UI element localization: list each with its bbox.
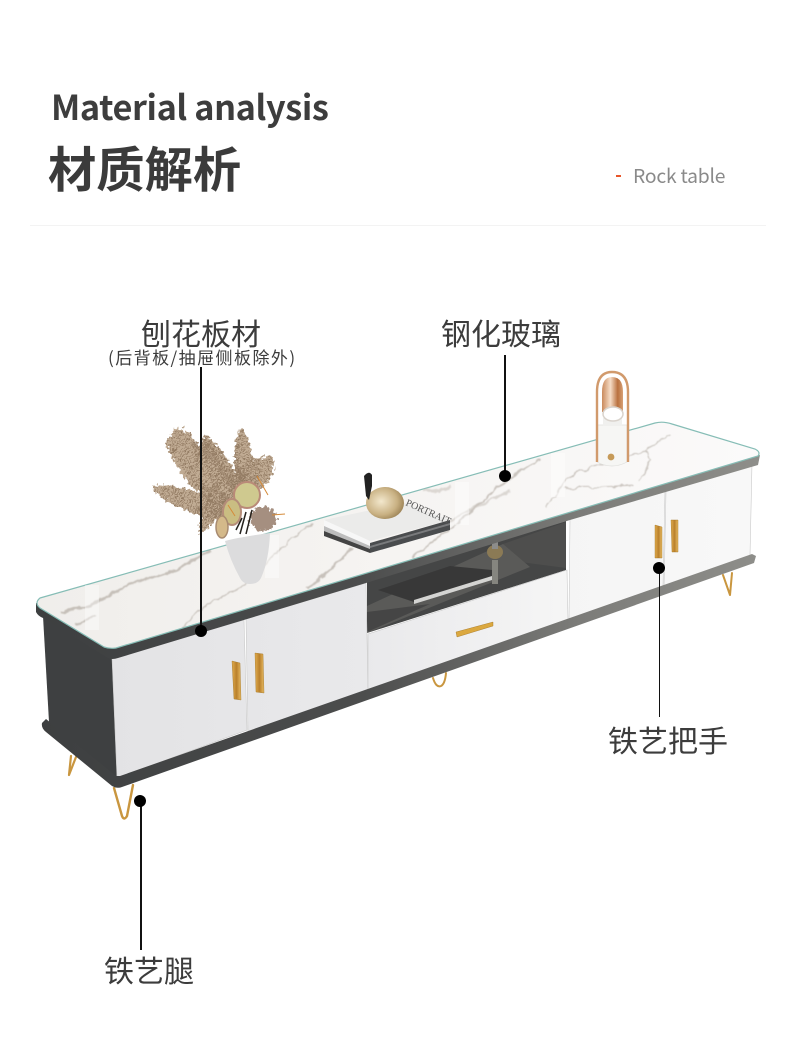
door handles (232, 520, 678, 700)
heading: 材质解析: 材质解析 (48, 131, 241, 201)
cabinet door fronts (112, 463, 752, 778)
label: 铁艺把手: 铁艺把手 (608, 717, 728, 761)
marble veins (60, 435, 670, 630)
marble glass table top (37, 422, 759, 648)
white vase (225, 533, 270, 584)
niche interior (367, 521, 566, 633)
callout line and dot: 钢化玻璃 (499, 355, 511, 482)
label: 刨花板材: 刨花板材 (141, 310, 261, 354)
product illustration: TV cabinet (36, 370, 760, 820)
stacked books: PORTRAIT (404, 498, 452, 527)
stacked books (324, 498, 452, 553)
table top band (36, 455, 760, 659)
base band (42, 554, 756, 788)
dry pampas bouquet (152, 427, 274, 537)
label: 钢化玻璃: 钢化玻璃 (441, 310, 561, 354)
callout line and dot: 刨花板材 (195, 367, 207, 637)
label: 铁艺腿: 铁艺腿 (104, 947, 194, 991)
copper lamp (597, 372, 628, 466)
cabinet left side (43, 616, 117, 778)
callout line and dot: 铁艺把手 (653, 562, 665, 717)
dried flowers (216, 476, 285, 538)
product name tag: Rock table: Rock table (633, 161, 725, 189)
callout line and dot: 铁艺腿 (134, 795, 146, 950)
gold apple and black bird (364, 473, 404, 519)
legs (69, 573, 732, 818)
sub-label: exclusions: (后背板/抽屉侧板除外) (108, 344, 297, 369)
heading: Material analysis: Material analysis (51, 80, 328, 130)
